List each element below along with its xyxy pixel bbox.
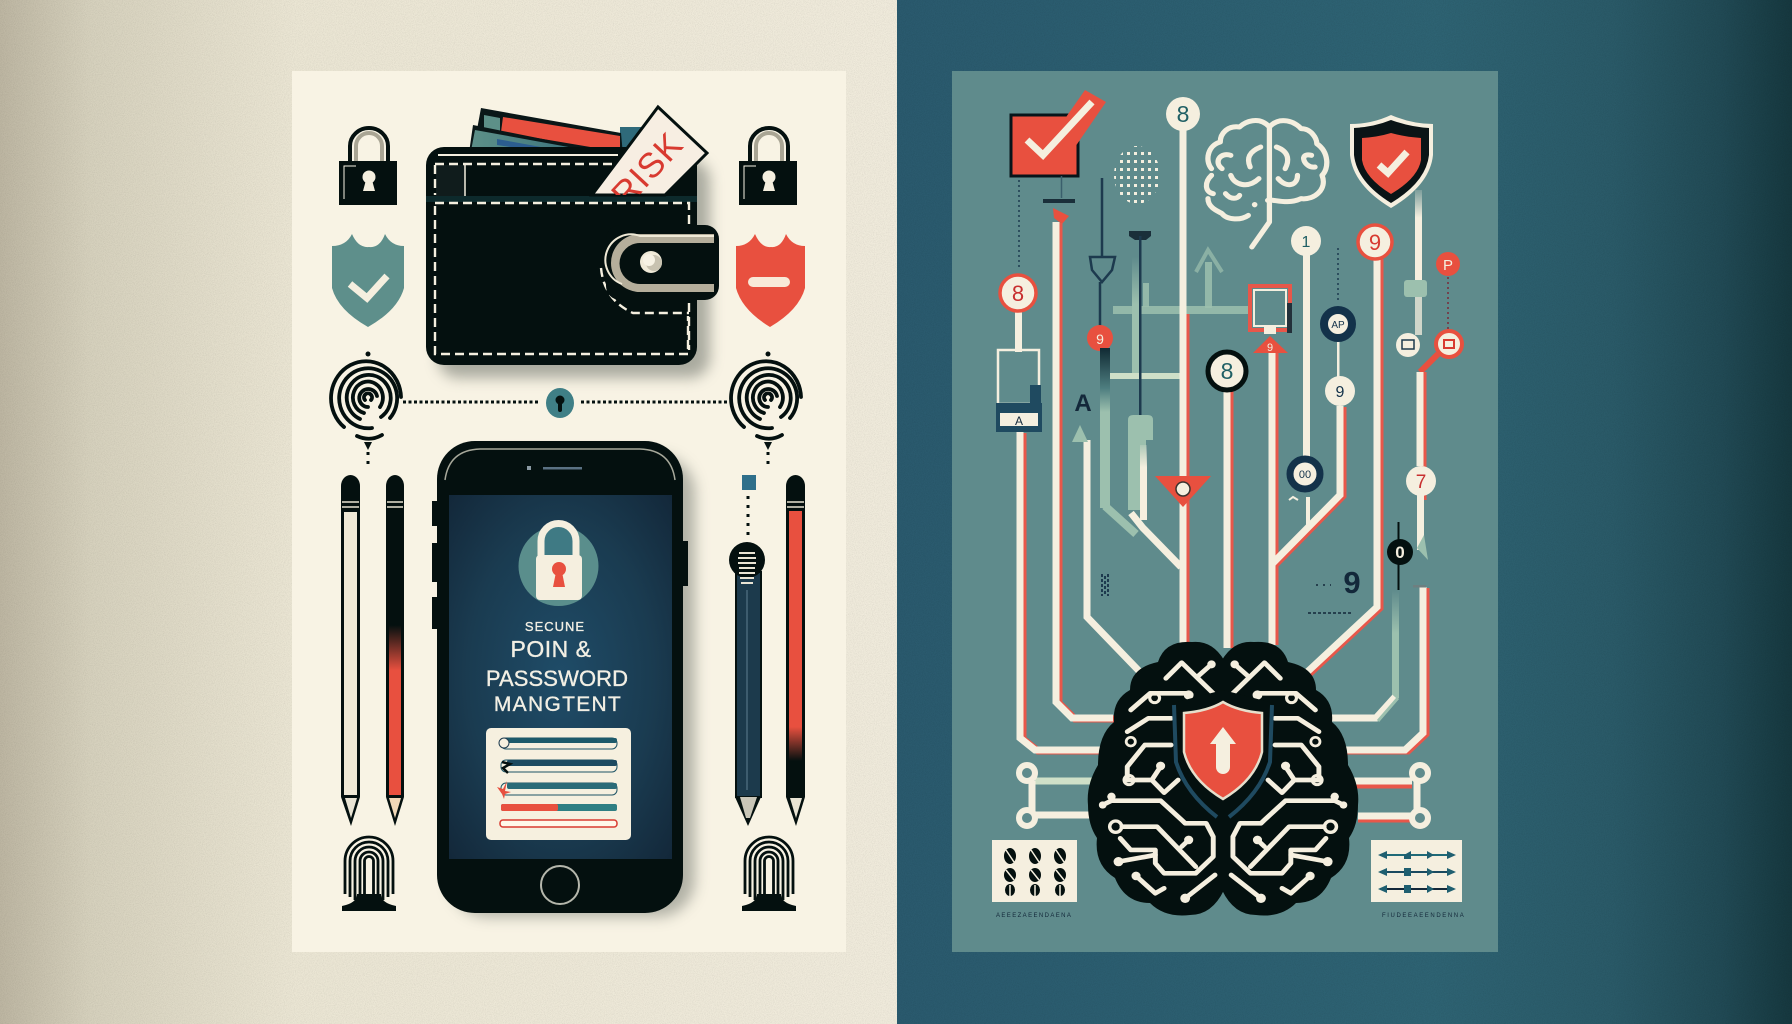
icon: left fingerprint xyxy=(331,352,401,466)
checkbox with red check xyxy=(1011,90,1106,270)
central shield xyxy=(1173,690,1273,818)
wallet strap and snap xyxy=(605,225,719,300)
small square with dotted line xyxy=(742,475,756,536)
icon: left padlock xyxy=(339,128,397,205)
funnel pipe with small red node: 9 xyxy=(1096,331,1104,347)
bottom connectors right xyxy=(1345,765,1428,826)
pipe: arrow to brain xyxy=(1072,425,1140,672)
screen heading: MANGTENT xyxy=(494,693,622,716)
node 0: 0 xyxy=(1395,543,1405,562)
pipe: red circle 9 to brain: 9 xyxy=(1369,230,1381,255)
pipe: branch from circle 9: AP xyxy=(1331,320,1345,331)
red P node with dotted line and red node xyxy=(1420,252,1462,372)
wallet body xyxy=(426,147,697,365)
pen: navy xyxy=(729,542,765,826)
pipe: branch from circle 9: 9 xyxy=(1336,384,1345,401)
pencil: red and black xyxy=(786,475,805,826)
circuit traces left xyxy=(1099,660,1216,903)
screen heading xyxy=(486,619,628,716)
junction box with triangle and stem: 9 xyxy=(1267,342,1273,354)
icon: left fingerprint head xyxy=(342,837,396,911)
mint arrow junction xyxy=(1110,250,1248,379)
triangle marker on centre pipe xyxy=(1155,476,1211,507)
pipe: red circle 9 to brain xyxy=(1304,225,1392,676)
risk tag xyxy=(589,104,710,196)
pipe: right outer to brain xyxy=(1343,585,1426,751)
pencil: cream xyxy=(341,475,360,826)
pipe: second left to brain xyxy=(1056,222,1116,719)
screen heading: POIN & xyxy=(511,636,591,662)
pipe: circle 1 with navy node xyxy=(1289,226,1321,527)
label: letter A: A xyxy=(1074,390,1092,417)
pencil: black and red xyxy=(386,475,404,826)
pipe: centre with number 8 xyxy=(1166,97,1200,645)
wallet xyxy=(426,107,719,378)
funnel pipe with small red node xyxy=(1087,178,1136,534)
login form card xyxy=(486,728,631,840)
icon: right padlock xyxy=(739,128,797,205)
pipe: circle 8 dark: 8 xyxy=(1221,358,1233,384)
icon: red shield with minus xyxy=(736,234,805,327)
circuit brain with shield xyxy=(1088,642,1358,916)
T-bar pipe branch xyxy=(1128,231,1181,567)
pipe: number 7 node xyxy=(1406,372,1436,560)
pipe: number 7 node: 7 xyxy=(1416,472,1426,493)
number node 8 red with box: A xyxy=(1015,414,1023,428)
smartphone xyxy=(432,441,695,917)
pipe: centre with number 8: 8 xyxy=(1177,101,1189,127)
dotted connector with keyhole xyxy=(403,388,727,418)
pipe: left outer to brain xyxy=(1020,432,1104,751)
cards in wallet xyxy=(468,108,642,160)
icon: shield with check xyxy=(1350,115,1433,208)
number node 8 red with box: 8 xyxy=(1012,281,1024,306)
label: number 9 and dashes xyxy=(1308,565,1361,613)
icon: right fingerprint head xyxy=(742,837,796,911)
lock badge xyxy=(518,524,598,606)
node 0 xyxy=(1387,522,1413,590)
junction box with triangle and stem xyxy=(1250,286,1292,645)
bottom connectors left xyxy=(1019,765,1101,826)
number node 8 red with box xyxy=(996,275,1042,432)
icon: brain outline xyxy=(1206,121,1327,247)
icon: right fingerprint xyxy=(731,352,801,466)
pipe: circle 8 dark xyxy=(1208,352,1246,648)
background: right half xyxy=(897,0,1792,1024)
card: arrow lines xyxy=(1371,840,1462,902)
label: number 9 and dashes: 9 xyxy=(1343,565,1361,600)
icon: teal shield with check xyxy=(332,234,404,327)
panel: wallet and phone xyxy=(292,71,846,952)
tiny caption right: FIUDEEAEENDENNA xyxy=(1382,913,1465,919)
phone side buttons xyxy=(432,501,688,629)
tiny caption left: AEEEZAEENDAENA xyxy=(996,913,1072,919)
phone body xyxy=(437,441,683,913)
panel: neural security paths xyxy=(952,71,1498,952)
icon: dotted sphere xyxy=(1114,146,1160,204)
circuit traces right xyxy=(1230,660,1347,903)
label: tiny blocks xyxy=(1102,574,1108,596)
screen heading: PASSSWORD xyxy=(486,666,628,691)
pipe: branch from circle 9 xyxy=(1273,248,1355,564)
top-right pipe and block xyxy=(1396,190,1427,357)
card: glyph grid xyxy=(992,840,1077,902)
pipe: circle 1 with navy node: 1 xyxy=(1302,234,1311,251)
phone screen xyxy=(449,495,672,859)
pipe: faded right to brain xyxy=(1331,590,1399,721)
pipe: circle 1 with navy node: 00 xyxy=(1299,469,1311,481)
screen heading: SECUNE xyxy=(525,619,585,634)
red P node with dotted line and red node: P xyxy=(1443,257,1453,274)
background: left half xyxy=(0,0,897,1024)
brain silhouette xyxy=(1088,642,1358,916)
risk tag: RISK xyxy=(604,125,691,214)
